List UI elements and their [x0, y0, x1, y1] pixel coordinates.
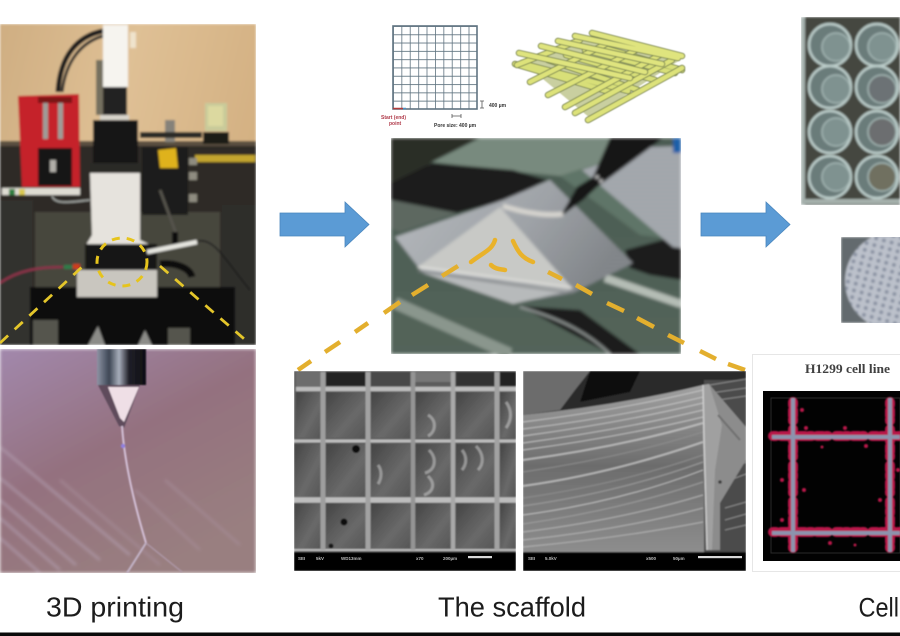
arrow: scaffold to cell culture: [701, 202, 790, 247]
SEM data bar: [528, 556, 742, 561]
label: The scaffold: The scaffold: [438, 592, 586, 622]
panel: 3D printer photo: [0, 24, 256, 345]
SEM data bar: x500: [646, 556, 657, 561]
arrow: printing to scaffold: [280, 202, 369, 247]
SEM data bar: 50µm: [673, 556, 685, 561]
zoom circle: [97, 238, 147, 286]
fluorescence grid image: [763, 391, 900, 561]
diagram: 2D print path grid: Start (end): [381, 115, 406, 121]
dashed zoom lines from scaffold to micrographs: [298, 266, 745, 370]
SEM data bar: 5kV: [316, 556, 324, 561]
heading: H1299 cell line: H1299 cell line: [805, 362, 890, 376]
diagram: 2D print path grid: 400 µm: [489, 103, 507, 109]
SEM data bar: WD13mm: [341, 556, 362, 561]
SEM data bar: 5.0kV: [545, 556, 557, 561]
bottom border: [0, 632, 900, 636]
diagram: 2D print path grid: [381, 26, 507, 129]
panel: SEM micrograph of filament strands: [523, 371, 746, 571]
diagram: 2D print path grid: point: [389, 121, 402, 127]
panel: nozzle close-up photo: [0, 349, 256, 573]
panel: H1299 cell line fluorescence image: [752, 354, 900, 572]
panel: scaffold disc photo: [841, 237, 900, 323]
SEM data bar: SEI: [298, 556, 305, 561]
SEM data bar: x70: [416, 556, 424, 561]
panel: scaffold held by tweezers photo: [391, 138, 681, 354]
SEM data bar: 200µm: [443, 556, 457, 561]
panel: SEM micrograph of grid: [294, 371, 516, 571]
yellow dashed triangle marker: [471, 240, 533, 270]
label: 3D printing: 3D printing: [46, 592, 184, 622]
diagram: 2D print path grid: Pore size: 400 µm: [434, 123, 477, 129]
SEM data bar: SEI: [528, 556, 535, 561]
dashed zoom lines: [0, 266, 250, 344]
panel: well plate photo: [801, 17, 900, 205]
diagram: yellow 3D lattice: [515, 33, 682, 120]
SEM data bar: [298, 556, 492, 561]
